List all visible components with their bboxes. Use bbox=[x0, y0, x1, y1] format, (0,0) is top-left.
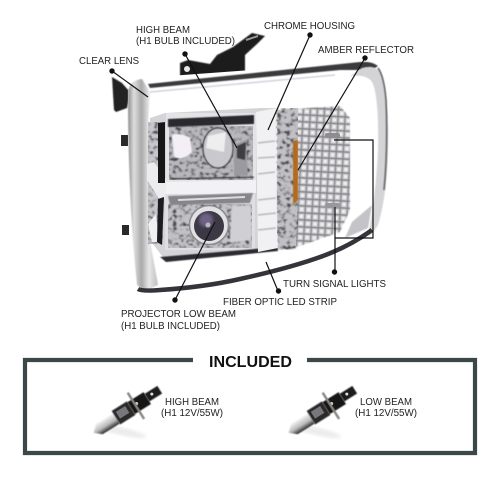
callout: projector low beam: (H1 BULB INCLUDED) bbox=[121, 321, 220, 332]
callout: chrome housing bbox=[264, 21, 355, 130]
callout: high beam: (H1 BULB INCLUDED) bbox=[136, 36, 235, 47]
panel: high beam reflector bbox=[166, 113, 256, 185]
callout: high beam: HIGH BEAM bbox=[136, 25, 190, 36]
panel: chrome housing bbox=[256, 108, 278, 252]
panel: included: (H1 12V/55W) bbox=[161, 408, 223, 419]
callout: clear lens: CLEAR LENS bbox=[79, 56, 139, 67]
turn signal bulbs bbox=[325, 133, 340, 138]
left reflector bbox=[147, 122, 168, 245]
panel: included: (H1 12V/55W) bbox=[355, 408, 417, 419]
fiber optic strip dark bottom edge bbox=[138, 230, 372, 291]
side nubs bbox=[121, 135, 129, 235]
mounting bracket bbox=[180, 33, 265, 82]
callout: high beam bbox=[136, 25, 237, 148]
callout: projector low beam bbox=[121, 222, 236, 332]
callout: fiber optic LED strip: FIBER OPTIC LED STRIP bbox=[223, 297, 337, 308]
callout: projector low beam: PROJECTOR LOW BEAM bbox=[121, 309, 236, 320]
label: high beam: HIGH BEAM bbox=[165, 397, 219, 408]
callout: clear lens bbox=[79, 56, 148, 97]
vertical dark trim bbox=[158, 122, 165, 183]
side clip bbox=[112, 77, 130, 112]
callout: fiber optic LED strip bbox=[223, 262, 337, 308]
dark top edge bbox=[148, 62, 378, 88]
panel: projector low beam bbox=[165, 193, 255, 250]
amber reflector strip bbox=[293, 140, 298, 205]
frame bbox=[25, 360, 475, 453]
projector lens bbox=[190, 206, 228, 244]
headlight assembly bbox=[112, 33, 388, 293]
icon: high beam bulb bbox=[85, 377, 179, 462]
chrome band between reflectors bbox=[166, 180, 256, 195]
label: low beam: LOW BEAM bbox=[360, 397, 412, 408]
lens body bbox=[128, 62, 388, 293]
diagonal chrome band bbox=[147, 162, 168, 200]
right chrome edge bbox=[350, 67, 388, 236]
panel: included bbox=[25, 354, 475, 462]
callout: amber reflector bbox=[298, 45, 414, 170]
callout: turn signal lights bbox=[283, 140, 386, 290]
heading: INCLUDED bbox=[209, 354, 292, 371]
icon: low beam bulb bbox=[280, 377, 374, 462]
dark trim under reflectors bbox=[160, 247, 278, 262]
callout: chrome housing: CHROME HOUSING bbox=[264, 21, 355, 32]
left chrome edge bbox=[128, 79, 158, 291]
panel: turn signal reflector bbox=[276, 106, 350, 250]
callout: turn signal lights: TURN SIGNAL LIGHTS bbox=[283, 279, 386, 290]
housing chrome inner bbox=[150, 108, 278, 260]
callout: amber reflector: AMBER REFLECTOR bbox=[318, 45, 414, 56]
